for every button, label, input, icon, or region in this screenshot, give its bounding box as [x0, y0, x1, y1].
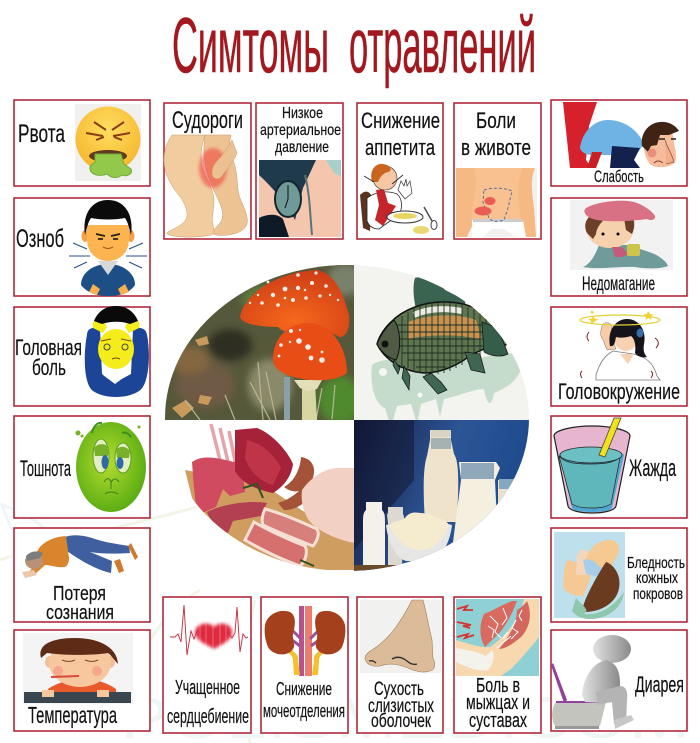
center food circle [160, 260, 534, 575]
label: nausea: Тошнота [20, 456, 71, 481]
label: low blood pressure [260, 105, 341, 156]
label: pale skin: кожных [636, 570, 678, 587]
label: pale skin [627, 555, 685, 603]
label: cramps: Судороги [172, 107, 243, 134]
label: dry mucous membranes: Сухость [374, 679, 424, 700]
icon: bent over man [563, 102, 679, 168]
panel: rapid heartbeat [163, 597, 251, 733]
label: muscle and joint pain [466, 675, 530, 732]
icon: boy with thermometer [23, 633, 133, 704]
panel: reduced urination [261, 597, 348, 733]
label: chills: Озноб [16, 225, 64, 253]
label: reduced urination [263, 679, 345, 721]
panel: loss of consciousness [14, 528, 150, 624]
label: loss of appetite: аппетита [365, 135, 436, 160]
icon: ECG heart [170, 605, 248, 655]
panel: cramps [164, 103, 251, 239]
label: vomiting: Рвота [18, 120, 65, 148]
icon: arm muscle [456, 599, 539, 676]
label: dry mucous membranes [368, 679, 434, 732]
label: loss of appetite: Снижение [361, 108, 440, 133]
label: loss of consciousness: Потеря [53, 583, 106, 605]
label: reduced urination: мочеотделения [263, 701, 345, 721]
panel: loss of appetite [357, 103, 443, 239]
label: fever: Температура [28, 702, 117, 728]
panel: thirst [551, 416, 687, 518]
icon: kidneys [265, 606, 345, 676]
panel: low blood pressure [256, 103, 343, 239]
quadrant: meat and poultry [185, 420, 354, 570]
label: malaise: Недомагание [582, 274, 655, 295]
label: muscle and joint pain: суставах [469, 710, 527, 732]
icon: nose [360, 600, 441, 673]
panel: weakness [551, 100, 687, 186]
label: loss of consciousness [46, 583, 114, 624]
label: low blood pressure: давление [275, 139, 329, 156]
label: rapid heartbeat: сердцебиение [167, 706, 249, 728]
quadrant: dairy products [354, 420, 534, 575]
label: abdominal pain [461, 108, 531, 160]
label: pale skin: покровов [633, 586, 683, 603]
panel: dry mucous membranes [357, 597, 443, 733]
panel: nausea [14, 416, 150, 518]
label: dry mucous membranes: слизистых [368, 696, 434, 717]
label: muscle and joint pain: мыжцах и [466, 692, 530, 714]
icon: vomiting emoji [75, 104, 141, 181]
label: headache: боль [32, 355, 66, 380]
label: headache: Головная [15, 335, 82, 360]
label: weakness: Слабость [594, 167, 644, 186]
icon: shivering boy [69, 200, 147, 296]
panel: abdominal pain [454, 103, 541, 239]
label: loss of appetite [361, 108, 440, 160]
icon: green sick face [76, 422, 146, 512]
icon: headache person [85, 306, 149, 397]
label: muscle and joint pain: Боль в [476, 675, 520, 697]
title: Симтомы [172, 1, 329, 89]
panel: vomiting [14, 100, 150, 186]
icon: glass with water [554, 418, 630, 513]
quadrant: poisonous mushrooms [165, 265, 357, 420]
label: dry mucous membranes: оболочек [371, 711, 432, 732]
label: abdominal pain: Боли [476, 108, 516, 133]
panel: chills [14, 198, 150, 296]
label: headache [15, 335, 82, 380]
panel: headache [14, 306, 150, 406]
icon: child refusing soup [360, 164, 437, 234]
label: rapid heartbeat: Учащенное [175, 677, 240, 699]
panel: diarrhea [551, 630, 687, 731]
label: reduced urination: Снижение [276, 679, 332, 699]
icon: torso with pain areas [456, 168, 537, 237]
background watermark [0, 505, 690, 743]
icon: cloth on forehead [554, 532, 625, 619]
label: low blood pressure: артериальное [260, 122, 341, 139]
panel: muscle and joint pain [454, 597, 541, 733]
icon: figure on toilet [551, 635, 634, 729]
icon: dizzy woman [580, 310, 660, 380]
panel: dizziness [551, 307, 687, 406]
label: loss of consciousness: сознания [46, 602, 114, 624]
panel: malaise [551, 198, 687, 296]
quadrant: fish [354, 265, 529, 420]
label: low blood pressure: Низкое [282, 105, 323, 122]
icon: blood pressure cuff [259, 160, 341, 237]
icon: child with hot water bottle [570, 200, 673, 270]
icon: lying man [22, 535, 138, 578]
label: rapid heartbeat [167, 677, 249, 728]
panel: fever [14, 630, 150, 731]
label: abdominal pain: в животе [461, 135, 531, 160]
icon: legs with cramp [164, 135, 247, 237]
panel: pale skin [551, 528, 687, 622]
